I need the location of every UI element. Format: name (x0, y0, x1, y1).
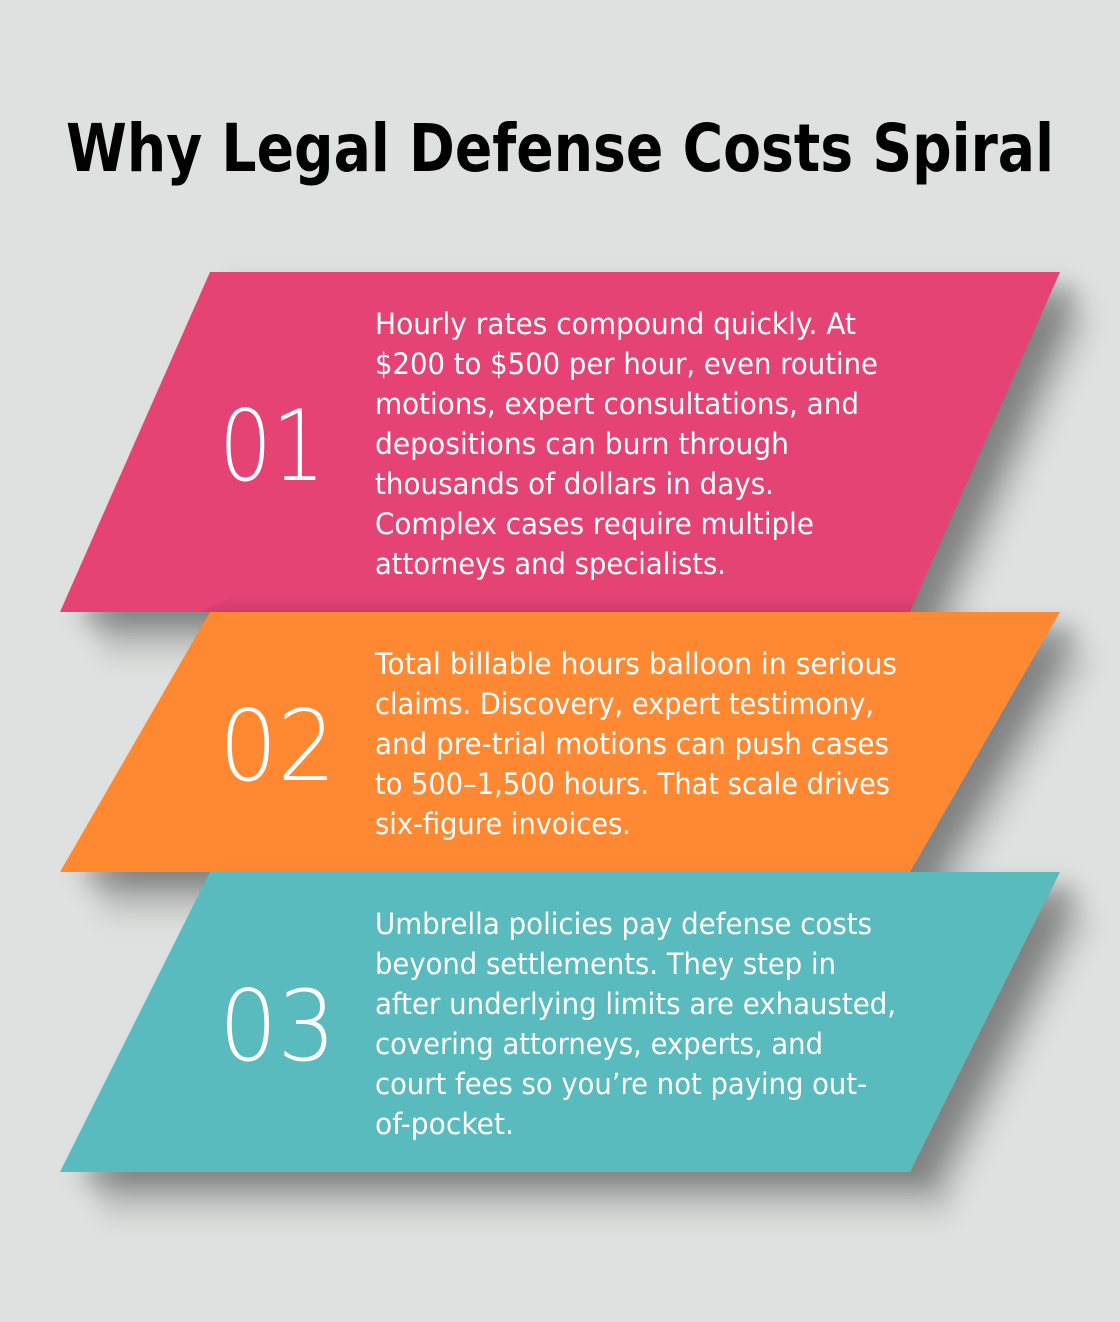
text: step 1 body: motions, expert consultations, and (375, 387, 859, 421)
text: step 3 body: after underlying limits are exhausted, (375, 987, 896, 1021)
text: step 1 body: Hourly rates compound quickly. At (375, 307, 856, 341)
text: step 1 body: attorneys and specialists. (375, 547, 726, 581)
panel: step 3 umbrella policies (60, 872, 1098, 1222)
shape: step 3 parallelogram (60, 872, 1060, 1172)
text: step 3 body: court fees so you’re not paying out- (375, 1067, 867, 1101)
text: step 1 body: Complex cases require multiple (375, 507, 814, 541)
text: step 3 body (375, 907, 896, 1141)
shadow: step 1 (74, 280, 1098, 662)
shading: step 1 lower edge (200, 594, 918, 612)
text: step 1 body: $200 to $500 per hour, even routine (375, 347, 878, 381)
text: step 2 body (374, 647, 897, 841)
text: step 3 body: covering attorneys, experts, and (375, 1027, 823, 1061)
number: 01: 01 (219, 390, 325, 504)
shadow: step 3 (74, 880, 1098, 1222)
panel: step 1 hourly rates (60, 272, 1098, 662)
text: step 2 body: Total billable hours balloon in serious (374, 647, 897, 681)
text: step 3 body: of-pocket. (375, 1107, 514, 1141)
shape: step 1 parallelogram (60, 272, 1060, 612)
text: step 1 body: depositions can burn through (375, 427, 789, 461)
text: step 2 body: and pre-trial motions can push cases (375, 727, 889, 761)
number: 03: 03 (219, 970, 336, 1084)
text: step 2 body: to 500–1,500 hours. That scale drives (375, 767, 890, 801)
panel: step 2 billable hours (60, 612, 1098, 922)
shape: step 2 parallelogram (60, 612, 1060, 872)
text: step 1 body: thousands of dollars in days. (375, 467, 774, 501)
text: step 3 body: beyond settlements. They step in (375, 947, 836, 981)
number: 02: 02 (219, 690, 336, 804)
text: step 2 body: six-figure invoices. (375, 807, 631, 841)
text: step 1 body (375, 307, 878, 581)
text: step 2 body: claims. Discovery, expert testimony, (375, 687, 874, 721)
text: step 3 body: Umbrella policies pay defense costs (375, 907, 872, 941)
shadow: step 2 (74, 620, 1098, 922)
